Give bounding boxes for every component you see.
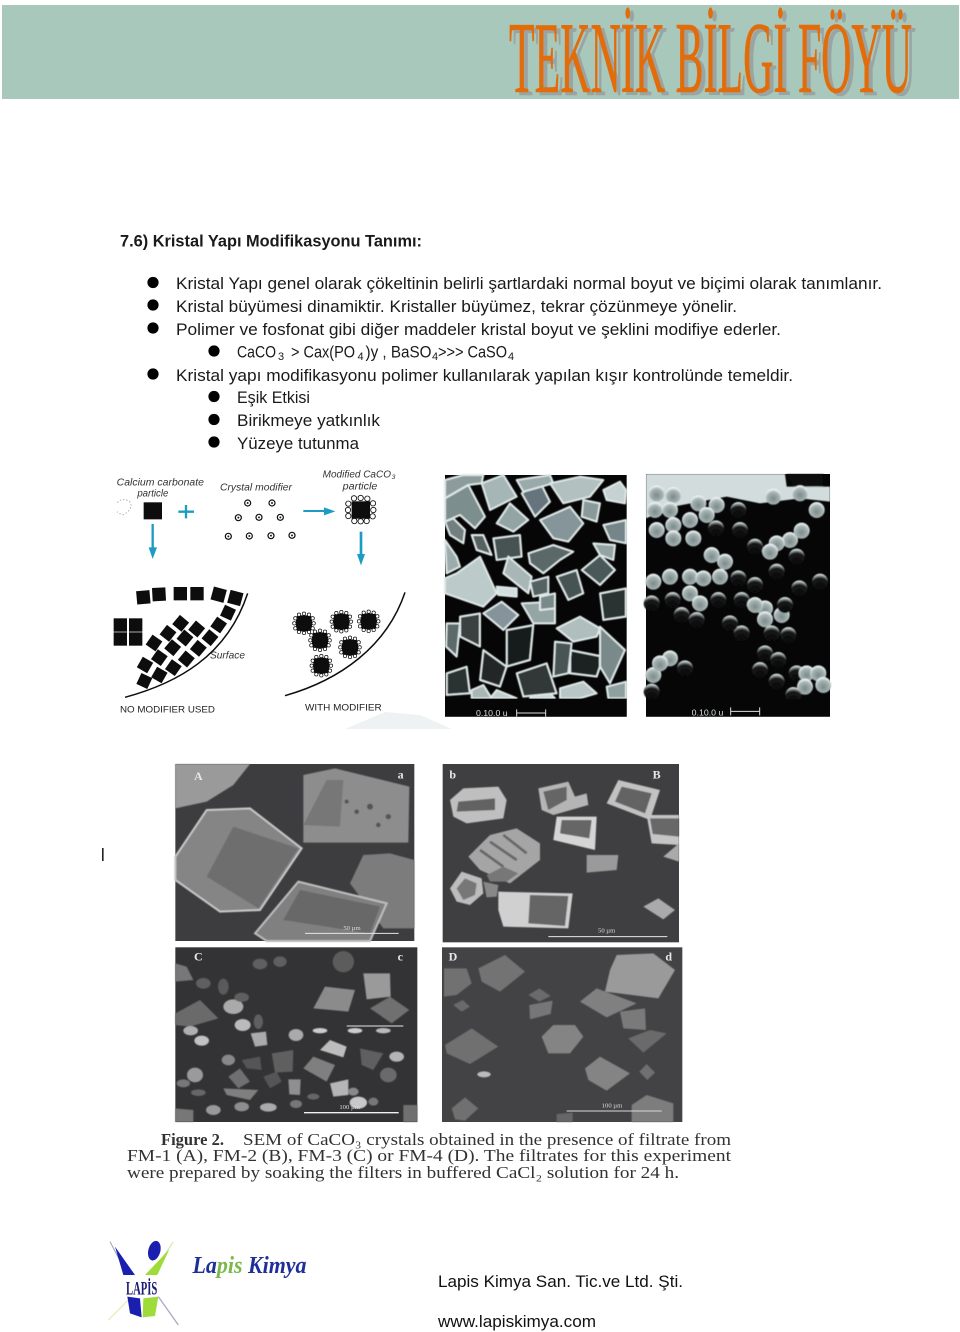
panel D: D — [449, 950, 458, 964]
arrow and plus — [149, 505, 365, 565]
label: calcium carbonate particle — [117, 477, 204, 519]
panel D — [442, 947, 682, 1122]
panel D: d — [665, 950, 672, 964]
scale bar: 0.10.0 u — [476, 708, 508, 718]
panel C: c — [398, 950, 404, 964]
label: crystal modifier — [220, 483, 295, 539]
panel: no modifier used: Surface — [210, 650, 245, 661]
panel: no modifier used: NO MODIFIER USED — [120, 704, 215, 714]
company name: Lapis Kimya San. Tic.ve Ltd. Şti. — [438, 1273, 683, 1291]
panel D: 100 µm — [602, 1102, 623, 1109]
logo: Lapis emblem: LAPİS — [126, 1278, 157, 1299]
bullet list: 4 — [508, 351, 514, 363]
scan smudge under diagram — [345, 712, 452, 729]
bullet list: Polimer ve fosfonat gibi diğer maddeler kristal boyut ve şeklini modifiye ederler. — [176, 320, 781, 339]
scale bar — [476, 708, 546, 718]
figure caption: Figure 2. — [161, 1130, 224, 1149]
label: crystal modifier: Crystal modifier — [220, 483, 293, 494]
bullet list: 4 — [432, 351, 438, 363]
label: calcium carbonate particle: particle — [136, 489, 169, 500]
panel A: a — [398, 767, 404, 781]
micrograph: spherical crystals with modifier — [644, 474, 831, 717]
bullet list: Birikmeye yatkınlık — [237, 411, 381, 430]
panel: with modifier — [285, 592, 405, 713]
panel B: b — [449, 767, 456, 781]
panel A — [175, 764, 414, 941]
label: modified CaCO3 particle: 3 — [392, 474, 396, 481]
panel B: B — [653, 767, 661, 781]
figure caption: SEM of CaCO₃ crystals obtained in the presence of filtrate from — [243, 1130, 731, 1149]
figure caption: FM-1 (A), FM-2 (B), FM-3 (C) or FM-4 (D). The filtrates for this experiment — [127, 1146, 731, 1165]
label: modified CaCO3 particle: Modified CaCO — [323, 469, 391, 480]
panel C: 100 µm — [339, 1104, 361, 1111]
panel: with modifier: WITH MODIFIER — [305, 703, 382, 713]
scale bar: 0.10.0 u — [692, 707, 724, 717]
website: www.lapiskimya.com — [437, 1313, 596, 1331]
panel B — [443, 764, 679, 942]
panel: no modifier used — [114, 587, 248, 714]
section heading: 7.6) Kristal Yapı Modifikasyonu Tanımı: — [120, 232, 422, 250]
bullet list: 4 — [358, 351, 364, 363]
diagram: crystal modifier mechanism — [114, 469, 405, 714]
bullet list: >>> CaSO — [438, 342, 507, 362]
label: calcium carbonate particle: Calcium carbonate — [117, 477, 204, 488]
logo: Lapis emblem — [108, 1239, 178, 1325]
bullet list: CaCO — [237, 342, 276, 362]
scale bar — [692, 707, 760, 717]
bullet list — [147, 274, 882, 453]
figure caption — [127, 1130, 731, 1182]
bullet list: Kristal Yapı genel olarak çökeltinin belirli şartlardaki normal boyut ve biçimi olarak tanımlanır. — [176, 274, 882, 293]
panel B: 50 µm — [598, 928, 616, 935]
stray text cursor mark — [102, 848, 104, 861]
label: modified CaCO3 particle: particle — [342, 481, 378, 492]
bullet list: Yüzeye tutunma — [237, 434, 360, 453]
bullet list: )y , BaSO — [366, 342, 432, 362]
bullet list: Kristal yapı modifikasyonu polimer kullanılarak yapılan kışır kontrolünde temeldir. — [176, 366, 793, 385]
bullet list: > Cax(PO — [291, 342, 355, 362]
header banner — [2, 2, 959, 118]
panel A: 50 µm — [343, 925, 361, 932]
panel A: A — [194, 769, 203, 783]
panel C — [175, 947, 417, 1122]
bullet list: Eşik Etkisi — [237, 388, 310, 407]
logo wordmark: Lapis Kimya: Lapis Kimya — [192, 1253, 306, 1279]
label: modified CaCO3 particle — [323, 469, 396, 524]
micrograph: cubic crystals without modifier — [445, 475, 627, 718]
figure caption: were prepared by soaking the filters in buffered CaCl₂ solution for 24 h. — [127, 1163, 679, 1182]
figure: four SEM panels — [175, 764, 682, 1122]
bullet list: Kristal büyümesi dinamiktir. Kristaller büyümez, tekrar çözünmeye yönelir. — [176, 297, 737, 316]
panel C: C — [194, 950, 203, 964]
bullet list: 3 — [278, 351, 284, 363]
